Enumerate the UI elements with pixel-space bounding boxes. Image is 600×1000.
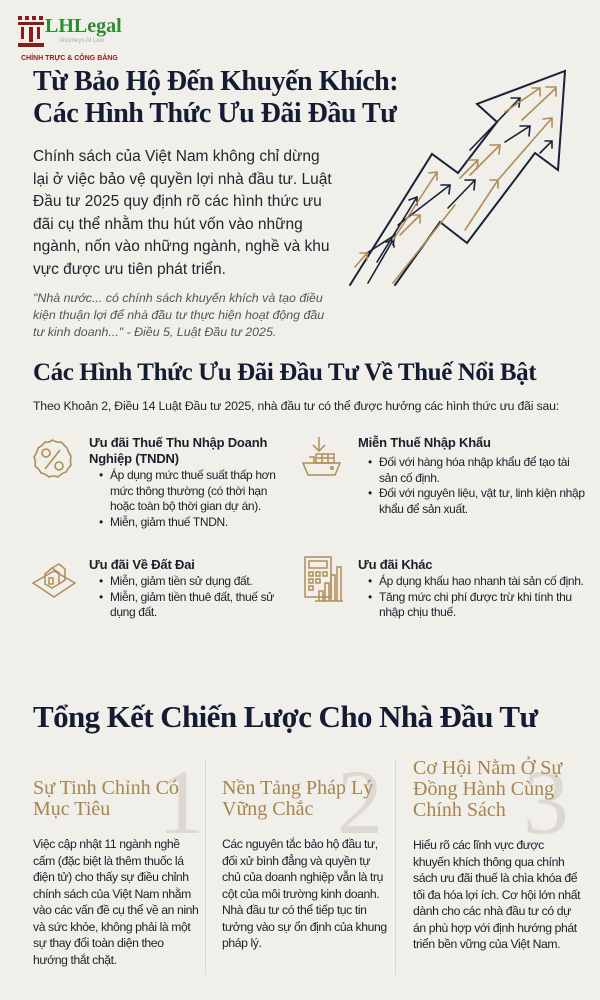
item: land incentives: Miễn, giảm tiền thuê đất, thuế sử dụng đất. bbox=[110, 590, 274, 619]
brand name: LHLegal bbox=[45, 15, 122, 37]
column 1: Việc cập nhật 11 ngành nghề cấm (đặc biệt là thêm thuốc lá điện tử) cho thấy sự điều chỉnh chính sách của Việt Nam nhằm vào các vấn đề cụ thể về an ninh và sức khỏe, không phải là một sự thay đổi toàn diện theo hướng thắt chặt. bbox=[33, 837, 198, 966]
icon: house on land bbox=[32, 563, 76, 598]
item: import duty exemption: Đối với nguyên liệu, vật tư, linh kiện nhập khẩu để sản xuất. bbox=[379, 486, 585, 516]
item: land incentives: Ưu đãi Về Đất Đai bbox=[89, 557, 195, 572]
item: land incentives: Miễn, giảm tiền sử dụng đất. bbox=[110, 574, 252, 588]
section heading: strategy summary: Tổng Kết Chiến Lược Cho Nhà Đầu Tư bbox=[33, 699, 538, 734]
logo: Attorneys At Law bbox=[59, 38, 104, 44]
item: import duty exemption: Đối với hàng hóa nhập khẩu để tạo tài sản cố định. bbox=[379, 455, 569, 484]
icon: logo mark bbox=[18, 16, 44, 47]
item: other incentives: Tăng mức chi phí được trừ khi tính thu nhập chịu thuế. bbox=[379, 590, 572, 619]
item: other incentives bbox=[304, 556, 584, 619]
tagline: CHÍNH TRỰC & CÔNG BẰNG bbox=[21, 55, 118, 62]
intro paragraph: Chính sách của Việt Nam không chỉ dừng lại ở việc bảo vệ quyền lợi nhà đầu tư. Luật Đầu tư 2025 quy định rõ các hình thức ưu đãi cụ thể nhằm thu hút vốn vào những ngành, nốn vào những ngành, nghề và khu vực được ưu tiên phát triển. bbox=[33, 148, 332, 278]
item: other incentives: Ưu đãi Khác bbox=[358, 557, 432, 572]
title bbox=[33, 66, 398, 129]
column 3: 3 bbox=[523, 751, 569, 853]
item: other incentives: Áp dụng khấu hao nhanh tài sản cố định. bbox=[379, 574, 584, 588]
column 3: Cơ Hội Nằm Ở Sự Đồng Hành Cùng Chính Sách bbox=[413, 757, 562, 821]
column 2: Các nguyên tắc bảo hộ đầu tư, đối xử bình đẳng và quyền tự chủ của doanh nghiệp vẫn là trụ cột của môi trường kinh doanh. Nhà đầu tư có thể tiếp tục tin tưởng vào sự ổn định của khung pháp lý. bbox=[222, 837, 387, 950]
column 3 bbox=[413, 751, 580, 951]
section heading: tax incentives: Các Hình Thức Ưu Đãi Đầu Tư Về Thuế Nổi Bật bbox=[33, 359, 536, 386]
item: land incentives bbox=[32, 557, 274, 619]
section intro: Theo Khoản 2, Điều 14 Luật Đầu tư 2025, nhà đầu tư có thể được hưởng các hình thức ưu đãi sau: bbox=[33, 399, 559, 413]
column 1: 1 bbox=[158, 751, 204, 853]
illustration: rising arrow bbox=[349, 70, 566, 286]
title: Từ Bảo Hộ Đến Khuyến Khích: bbox=[33, 66, 398, 97]
quote: "Nhà nước... có chính sách khuyến khích và tạo điều kiện thuận lợi để nhà đầu tư thực hiện hoạt động đầu tư kinh doanh..." - Điều 5, Luật Đầu tư 2025. bbox=[33, 291, 324, 339]
title: Các Hình Thức Ưu Đãi Đầu Tư bbox=[33, 98, 396, 129]
item: CIT incentive: Ưu đãi Thuế Thu Nhập Doanh Nghiệp (TNDN) bbox=[89, 435, 267, 466]
column 1 bbox=[33, 751, 204, 966]
item: CIT incentive: Áp dụng mức thuế suất thấp hơn mức thông thường (có thời hạn hoặc toàn bộ thời gian dự án). bbox=[110, 468, 276, 513]
column 2: 2 bbox=[337, 751, 383, 853]
icon: percent badge bbox=[33, 439, 72, 478]
column 1: Sự Tinh Chỉnh Có Mục Tiêu bbox=[33, 777, 179, 820]
item: CIT incentive: Miễn, giảm thuế TNDN. bbox=[110, 514, 228, 528]
item: CIT incentive bbox=[33, 435, 276, 528]
column 2: Nền Tảng Pháp Lý Vững Chắc bbox=[222, 777, 373, 820]
item: import duty exemption bbox=[302, 435, 585, 516]
column 3: Hiểu rõ các lĩnh vực được khuyến khích thông qua chính sách ưu đãi thuế là chìa khóa để tối đa hóa lợi ích. Cơ hội lớn nhất dành cho các nhà đầu tư có dự án phù hợp với định hướng phát triển bền vững của Việt Nam. bbox=[413, 838, 580, 951]
logo bbox=[18, 15, 122, 62]
icon: calculator and chart bbox=[304, 556, 343, 602]
icon: cargo ship bbox=[302, 437, 342, 476]
column 2 bbox=[222, 751, 387, 950]
item: import duty exemption: Miễn Thuế Nhập Khẩu bbox=[358, 435, 491, 450]
